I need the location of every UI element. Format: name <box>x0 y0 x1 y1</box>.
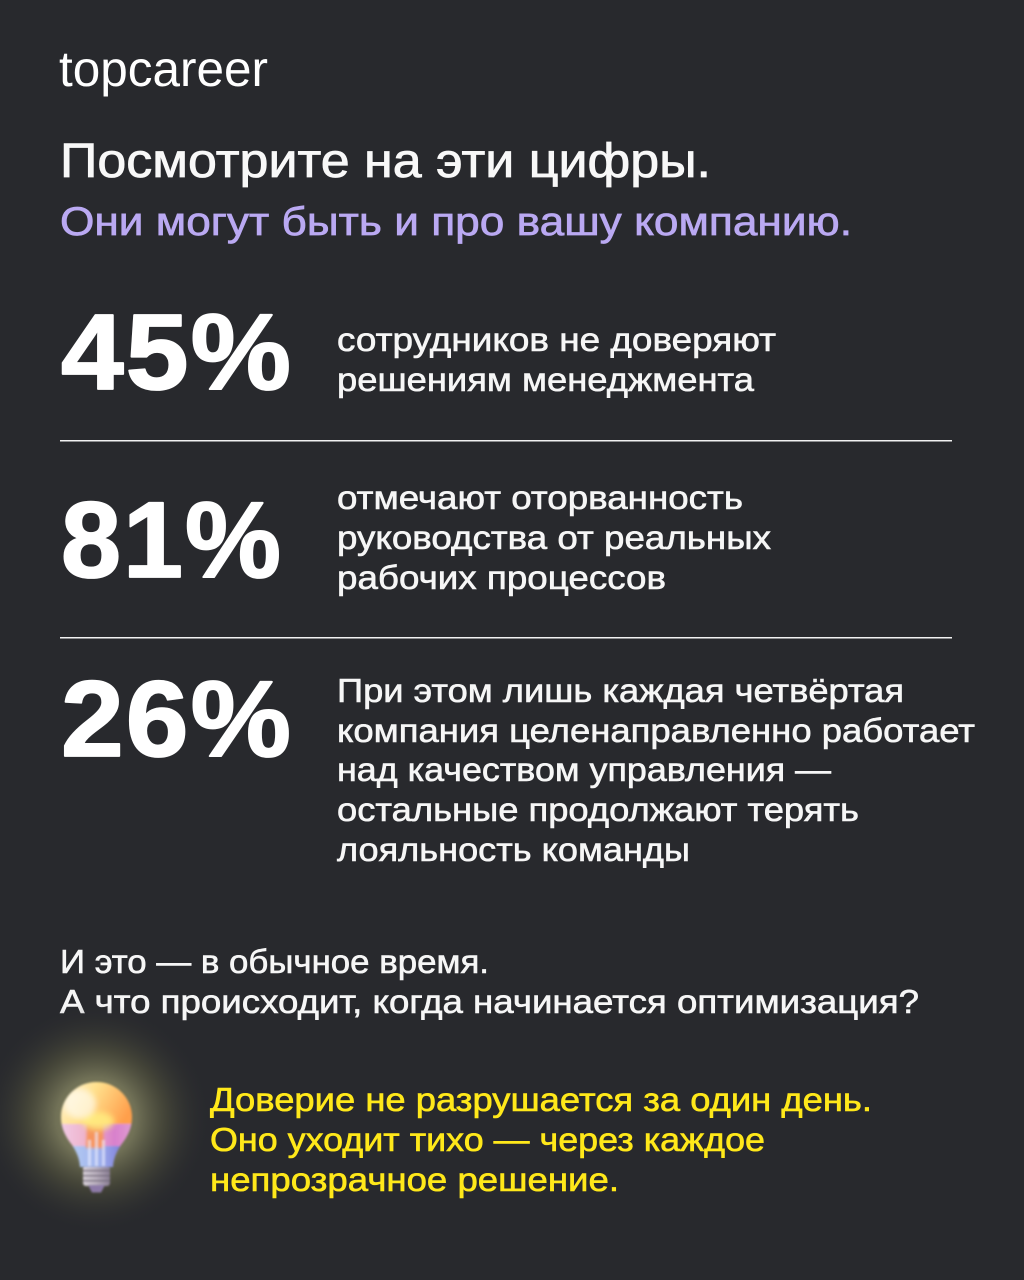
stat: 45% <box>61 291 776 412</box>
description: сотрудников не доверяют <box>337 321 776 358</box>
title line: Посмотрите на эти цифры. <box>60 135 711 188</box>
glass <box>60 1080 134 1168</box>
number: 81% <box>61 479 283 600</box>
description: При этом лишь каждая четвёртая <box>337 672 904 709</box>
description <box>337 321 776 398</box>
number: 26% <box>61 658 293 779</box>
subtitle line: Они могут быть и про вашу компанию. <box>60 200 852 244</box>
glow <box>0 1003 211 1233</box>
screw base <box>83 1165 110 1192</box>
heading <box>60 135 852 244</box>
description: рабочих процессов <box>337 559 666 596</box>
description <box>337 479 772 596</box>
icon: light bulb <box>6 1006 186 1208</box>
conclusion text <box>210 1081 872 1198</box>
description: над качеством управления — <box>337 751 831 788</box>
stat: 81% <box>61 479 772 600</box>
description: остальные продолжают терять <box>337 791 859 828</box>
conclusion text: Оно уходит тихо — через каждое <box>210 1121 765 1158</box>
description: лояльность команды <box>337 831 690 868</box>
description: компания целенаправленно работает <box>337 712 975 749</box>
question text <box>60 943 919 1020</box>
conclusion text: Доверие не разрушается за один день. <box>210 1081 872 1118</box>
description: отмечают оторванность <box>337 479 743 516</box>
stat: 26% <box>61 658 975 868</box>
description <box>337 672 975 868</box>
description: решениям менеджмента <box>337 361 755 398</box>
description: руководства от реальных <box>337 519 772 556</box>
number: 45% <box>61 291 293 412</box>
question text: И это — в обычное время. <box>60 943 489 980</box>
question text: А что происходит, когда начинается оптимизация? <box>60 983 919 1020</box>
conclusion text: непрозрачное решение. <box>210 1161 619 1198</box>
logo: topcareer <box>59 41 268 97</box>
